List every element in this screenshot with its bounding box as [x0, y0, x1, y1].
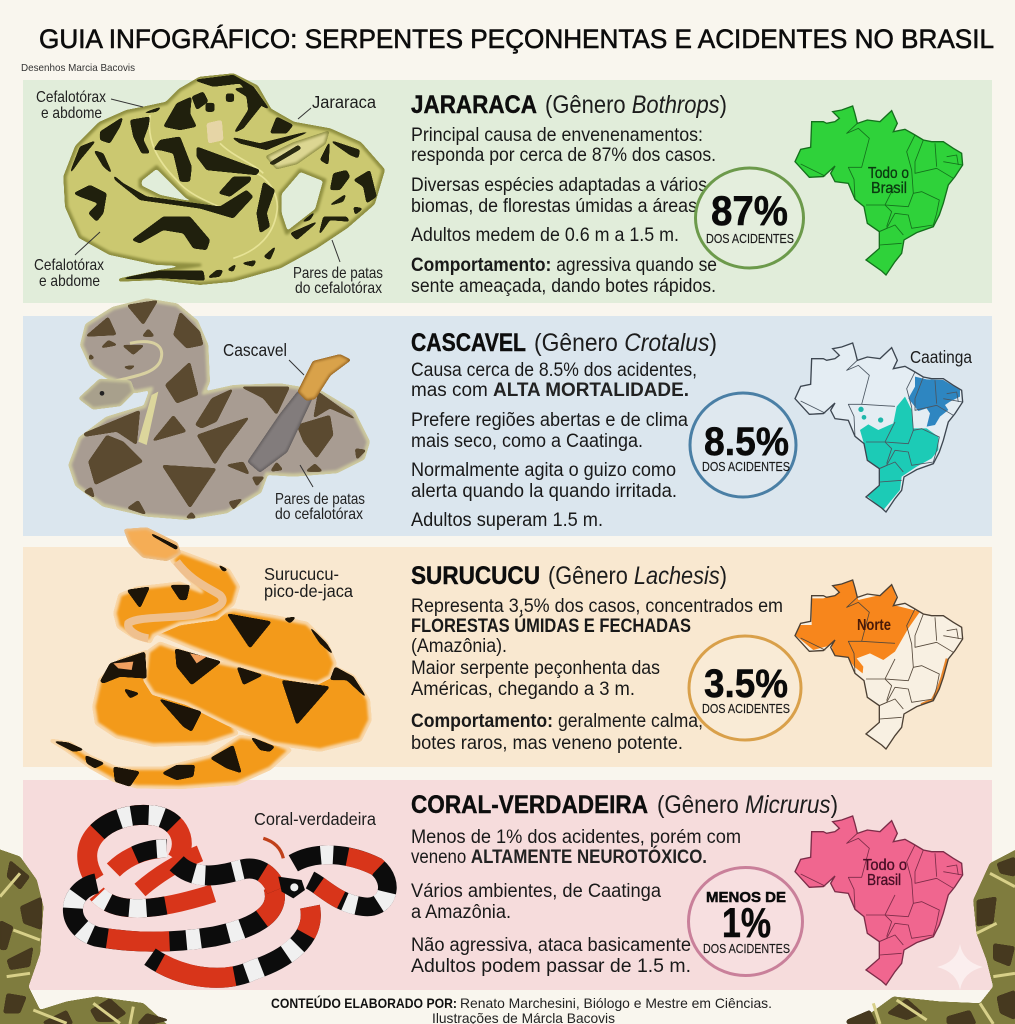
map: todo o Brasil (verde): Brasil	[871, 180, 907, 197]
label: cascavel: Cascavel	[223, 340, 287, 360]
decoration: snake bottom right	[843, 843, 1015, 1024]
label: cefalotórax inferior	[34, 232, 104, 290]
text block: cascavel	[411, 360, 697, 531]
label: pares de patas: do cefalotórax	[295, 280, 382, 297]
text block: jararaca: Principal causa de envenenamentos:	[411, 125, 703, 146]
text block: jararaca: Comportamento: agressiva quando se	[411, 255, 717, 276]
text block: surucucu: (Amazônia).	[411, 636, 507, 657]
footer credits: Renato Marchesini, Biólogo e Mestre em Ciências.	[460, 995, 772, 1011]
heading: coral-verdadeira	[411, 791, 838, 819]
heading: jararaca: JARARACA	[411, 91, 537, 119]
map: caatinga	[795, 343, 972, 512]
callout: 8.5%: 8.5%	[704, 420, 789, 464]
text block: coral-verdadeira: a Amazônia.	[411, 902, 511, 923]
text block: cascavel: alerta quando la quando irritada.	[411, 481, 677, 502]
callout: 8.5%: DOS ACIDENTES	[702, 460, 790, 474]
label: jararaca: Jararaca	[312, 92, 376, 112]
callout: menos de 1%: MENOS DE	[706, 889, 786, 906]
heading: jararaca: (Gênero Bothrops)	[545, 91, 727, 119]
illustration: surucucu snake	[52, 528, 370, 787]
label: surucucu-pico-de-jaca: pico-de-jaca	[264, 581, 353, 601]
text block: cascavel: mas com ALTA MORTALIDADE.	[411, 380, 689, 401]
heading: surucucu	[411, 562, 727, 590]
footer credits	[271, 994, 772, 1024]
text block: surucucu: Américas, chegando a 3 m.	[411, 679, 635, 700]
callout: 3.5%: DOS ACIDENTES	[702, 702, 790, 716]
text block: jararaca: Diversas espécies adaptadas a vários	[411, 175, 707, 196]
text block: cascavel: Causa cerca de 8.5% dos acidentes,	[411, 360, 697, 381]
illustration: coral snake	[73, 815, 387, 978]
callout: menos de 1%: 1%	[722, 899, 771, 946]
text block: coral-verdadeira: Adultos podem passar de 1.5 m.	[411, 956, 691, 977]
heading: coral-verdadeira: (Gênero Micrurus)	[657, 791, 838, 819]
label: pares de patas: do cefalotórax	[275, 506, 363, 523]
heading: surucucu: SURUCUCU	[411, 562, 540, 590]
text block: surucucu: Representa 3,5% dos casos, concentrados em	[411, 596, 783, 617]
map: todo o Brasil (rosa)	[795, 816, 963, 985]
text block: jararaca: biomas, de florestas úmidas a áreas	[411, 196, 697, 217]
text block: coral-verdadeira: Não agressiva, ataca basicamente	[411, 935, 691, 956]
footer credits: CONTEÚDO ELABORADO POR:	[271, 994, 457, 1011]
label: pares de patas: Pares de patas	[275, 491, 365, 508]
credit: desenhos: Desenhos Marcia Bacovis	[21, 62, 135, 74]
label: cascavel	[223, 340, 304, 375]
panel: surucucu	[23, 528, 992, 787]
map: norte: Norte	[857, 617, 891, 634]
heading: jararaca	[411, 91, 727, 119]
text block: jararaca: sente ameaçada, dando botes rápidos.	[411, 276, 716, 297]
text block: surucucu: FLORESTAS ÚMIDAS E FECHADAS	[411, 615, 691, 637]
map: todo o Brasil (verde)	[795, 106, 963, 275]
heading: cascavel: CASCAVEL	[411, 329, 526, 357]
label: cefalotórax inferior: Cefalotórax	[34, 257, 104, 274]
panel: cascavel	[23, 300, 992, 536]
label: cefalotórax superior: e abdome	[41, 105, 102, 122]
callout: 8.5%	[690, 393, 796, 497]
text block: jararaca: Adultos medem de 0.6 m a 1.5 m.	[411, 225, 679, 246]
text block: jararaca	[411, 125, 717, 297]
label: pares de patas	[293, 240, 383, 297]
map: todo o Brasil (rosa): Todo o	[863, 857, 907, 874]
heading: surucucu: (Gênero Lachesis)	[548, 562, 727, 590]
heading: coral-verdadeira: CORAL-VERDADEIRA	[411, 791, 648, 819]
panel: coral-verdadeira	[23, 780, 992, 990]
map: todo o Brasil (rosa): Brasil	[867, 872, 901, 889]
text block: coral-verdadeira: veneno ALTAMENTE NEUROTÓXICO.	[411, 846, 707, 868]
callout: menos de 1%	[688, 868, 802, 976]
text block: cascavel: Normalmente agita o guizo como	[411, 460, 676, 481]
map: norte	[795, 580, 963, 749]
illustration: jararaca snake	[65, 75, 383, 283]
text block: coral-verdadeira: Vários ambientes, de Caatinga	[411, 881, 661, 902]
label: pares de patas: Pares de patas	[293, 265, 383, 282]
text block: surucucu: botes raros, mas veneno potente.	[411, 733, 683, 754]
label: jararaca	[298, 92, 376, 119]
text block: jararaca: responda por cerca de 87% dos casos.	[411, 145, 716, 166]
text block: surucucu: Comportamento: geralmente calma,	[411, 711, 703, 732]
label: coral-verdadeira: Coral-verdadeira	[254, 809, 376, 829]
text block: surucucu	[411, 596, 783, 754]
heading: cascavel	[411, 329, 717, 357]
callout: menos de 1%: DOS ACIDENTES	[703, 942, 790, 956]
callout: 87%: DOS ACIDENTES	[706, 232, 794, 246]
illustration: cascavel snake	[70, 300, 368, 518]
decoration: snake bottom left	[0, 845, 177, 1024]
label: surucucu-pico-de-jaca: Surucucu-	[264, 564, 339, 584]
text block: coral-verdadeira	[411, 827, 741, 977]
label: cefalotórax inferior: e abdome	[39, 273, 100, 290]
callout: 87%	[696, 168, 804, 268]
callout: 87%: 87%	[711, 187, 788, 234]
text block: cascavel: Adultos superam 1.5 m.	[411, 510, 603, 531]
title: GUIA INFOGRÁFICO: SERPENTES PEÇONHENTAS E ACIDENTES NO BRASIL	[39, 24, 994, 54]
panel: jararaca	[23, 75, 992, 303]
text block: surucucu: Maior serpente peçonhenta das	[411, 658, 660, 679]
label: cefalotórax superior	[36, 89, 143, 122]
text block: cascavel: mais seco, como a Caatinga.	[411, 431, 643, 452]
callout: 3.5%	[689, 636, 801, 740]
label: cefalotórax superior: Cefalotórax	[36, 89, 106, 106]
heading: cascavel: (Gênero Crotalus)	[534, 329, 717, 357]
label: pares de patas	[275, 465, 365, 523]
callout: 3.5%: 3.5%	[704, 662, 788, 706]
icon: sparkle	[937, 944, 983, 990]
label: surucucu-pico-de-jaca	[264, 564, 353, 601]
map: todo o Brasil (verde): Todo o	[868, 165, 909, 182]
text block: cascavel: Prefere regiões abertas e de clima	[411, 410, 688, 431]
text block: coral-verdadeira: Menos de 1% dos acidentes, porém com	[411, 827, 741, 848]
map: caatinga: Caatinga	[910, 347, 972, 367]
